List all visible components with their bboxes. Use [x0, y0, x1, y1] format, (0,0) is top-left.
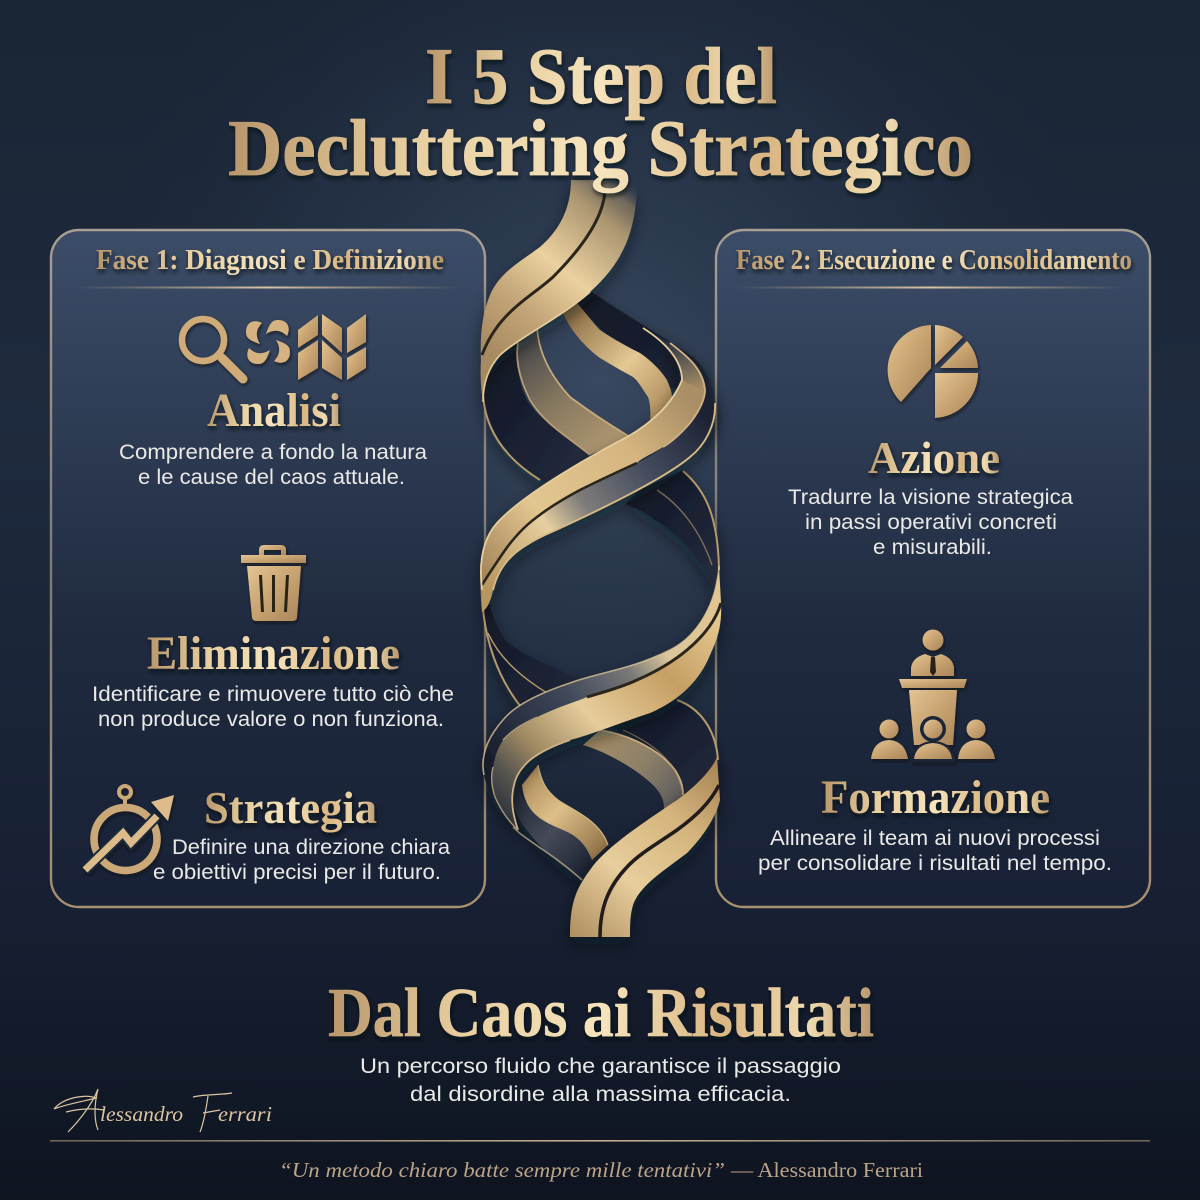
ribbon strand: bottom gold — [570, 757, 720, 937]
step: formazione: per consolidare i risultati nel tempo. — [758, 852, 1112, 875]
step: strategia: e obiettivi precisi per il futuro. — [153, 861, 441, 884]
ribbon strand: middle crossing — [481, 328, 715, 612]
dark back bands — [483, 292, 720, 881]
signature: lessandro — [100, 1102, 183, 1126]
closing heading and text: Dal Caos ai Risultati — [328, 975, 874, 1052]
footer quote: “Un metodo chiaro batte sempre mille tentativi” — [279, 1158, 725, 1182]
central gold ribbon helix — [481, 180, 721, 937]
signature — [54, 1089, 272, 1132]
icon: pie chart — [888, 325, 978, 418]
heading: fase 1: Fase 1: Diagnosi e Definizione — [96, 245, 444, 276]
icon: magnifier, pinwheel and map — [182, 314, 366, 380]
footer quote — [279, 1158, 923, 1182]
step: azione: Tradurre la visione strategica — [788, 486, 1073, 509]
icon: trash can — [241, 545, 306, 621]
step: analisi: Comprendere a fondo la natura — [119, 441, 427, 464]
step: formazione — [758, 771, 1112, 875]
step: azione — [788, 432, 1073, 559]
step: strategia: Definire una direzione chiara — [172, 836, 450, 859]
step: analisi — [119, 384, 427, 489]
panel: fase 2 box — [716, 230, 1150, 907]
step: analisi: e le cause del caos attuale. — [138, 466, 405, 489]
panel content: fase 1 — [75, 245, 460, 884]
step: strategia: Strategia — [204, 782, 377, 833]
closing heading and text: dal disordine alla massima efficacia. — [410, 1082, 791, 1106]
closing heading and text: Un percorso fluido che garantisce il passaggio — [360, 1054, 841, 1078]
footer quote: — Alessandro Ferrari — [730, 1158, 923, 1182]
step: formazione: Allineare il team ai nuovi processi — [770, 827, 1100, 850]
title: Decluttering Strategico — [228, 105, 973, 193]
step: eliminazione — [92, 627, 454, 731]
panel content: fase 2 — [735, 245, 1132, 875]
step: strategia — [153, 782, 450, 884]
title: I 5 Step del — [425, 33, 777, 121]
panel: fase 1 box — [51, 230, 485, 907]
heading: fase 2: Fase 2: Esecuzione e Consolidamento — [736, 245, 1132, 276]
thin outlines on back bands — [482, 395, 719, 880]
step: formazione: Formazione — [821, 771, 1050, 824]
ribbon strand: top gold — [481, 180, 637, 402]
icon: target compass with rising arrow — [85, 786, 174, 870]
step: analisi: Analisi — [207, 384, 341, 437]
ribbon strand: lower crossing — [483, 566, 721, 830]
step: azione: in passi operativi concreti — [805, 511, 1057, 534]
closing heading and text — [328, 975, 874, 1106]
icon: speaker at lectern with audience — [871, 630, 995, 762]
signature: errari — [218, 1102, 272, 1126]
step: eliminazione: non produce valore o non funziona. — [98, 708, 444, 731]
step: azione: e misurabili. — [873, 536, 992, 559]
step: azione: Azione — [868, 432, 1000, 483]
footer divider — [50, 1140, 1150, 1142]
step: eliminazione: Identificare e rimuovere tutto ciò che — [92, 683, 454, 706]
title — [228, 33, 973, 193]
inner bronze and gold bands — [517, 303, 683, 860]
step: eliminazione: Eliminazione — [147, 627, 400, 680]
